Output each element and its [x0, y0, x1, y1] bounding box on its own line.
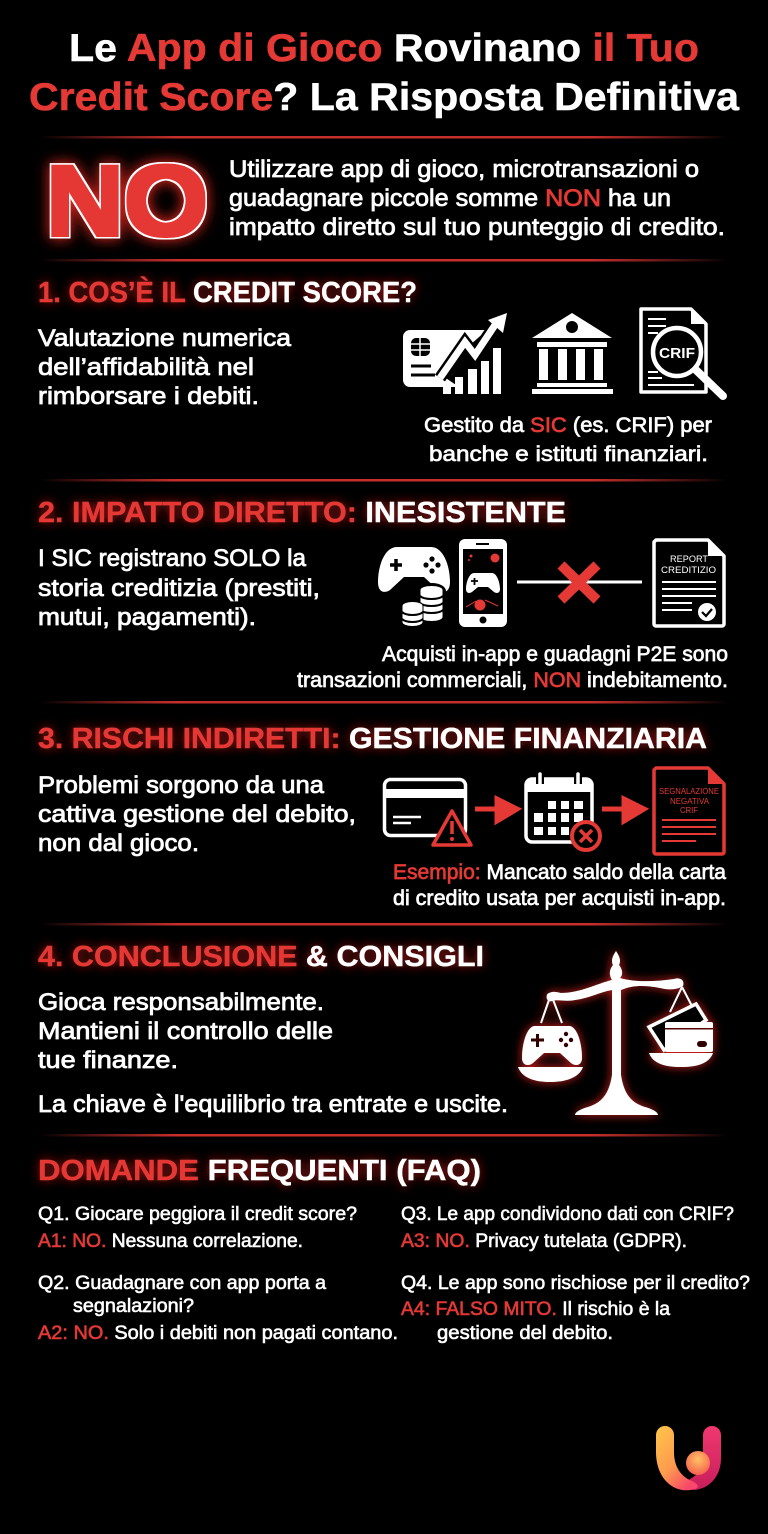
FAQ Q4 [401, 1273, 750, 1344]
icon: gamepad and coins [378, 547, 450, 626]
heading 2: 2. IMPATTO DIRETTO: INESISTENTE [38, 497, 566, 529]
title [29, 27, 740, 119]
text block 2: mutui, pagamenti). [38, 604, 256, 631]
caption 2 [297, 643, 728, 692]
FAQ Q2 [38, 1273, 398, 1344]
FAQ Q3: Q3. Le app condividono dati con CRIF? [401, 1204, 734, 1225]
text block 1: Valutazione numerica [38, 325, 292, 352]
FAQ Q4: gestione del debito. [437, 1323, 613, 1344]
FAQ Q4: A4: FALSO MITO. Il rischio è la [401, 1299, 670, 1320]
icon: CRIF document with magnifier [641, 309, 723, 396]
text block 1: dell’affidabilità nel [38, 354, 254, 381]
icon: brand logo [656, 1426, 721, 1490]
panel: NO verdict [46, 145, 725, 256]
text block 3 [38, 772, 356, 857]
FAQ Q2: A2: NO. Solo i debiti non pagati contano. [38, 1323, 398, 1344]
big NO: NO [46, 145, 208, 256]
verdict text: guadagnare piccole somme NON ha un [229, 185, 671, 212]
panel: section 3 indirect risks [38, 723, 726, 910]
text block 4: Mantieni il controllo delle [38, 1018, 333, 1045]
icon: balance scale with gamepad and card [518, 951, 713, 1115]
caption 3: di credito usata per acquisti in-app. [393, 887, 726, 910]
text block 4: Gioca responsabilmente. [38, 989, 324, 1016]
title: Credit Score ? La Risposta Definitiva [29, 76, 740, 119]
verdict text: impatto diretto sul tuo punteggio di credito. [229, 214, 725, 241]
arrow 2 [602, 799, 644, 821]
icon: card with warning [384, 780, 471, 845]
icon: broken link cross [517, 565, 642, 600]
text block 2: I SIC registrano SOLO la [38, 545, 307, 572]
panel: FAQ [38, 1155, 750, 1344]
text block 1 [38, 325, 292, 410]
caption 2: Acquisti in-app e guadagni P2E sono [382, 643, 728, 666]
icon: credit card with rising chart [403, 313, 507, 394]
text block 1: rimborsare i debiti. [38, 383, 259, 410]
panel: section 2 direct impact [38, 497, 728, 692]
icon: phone with game [459, 539, 507, 627]
text block 2: storia creditizia (prestiti, [38, 575, 320, 602]
panel: section 4 conclusion [38, 941, 713, 1118]
FAQ Q2: Q2. Guadagnare con app porta a [38, 1273, 326, 1294]
FAQ Q4: Q4. Le app sono rischiose per il credito? [401, 1273, 750, 1294]
caption 1: Gestito da SIC (es. CRIF) per [424, 414, 712, 437]
icon: calendar with missed payment [526, 773, 600, 850]
verdict text [229, 156, 725, 241]
text block 3: non dal gioco. [38, 830, 199, 857]
icon: negative report: NEGATIVA [670, 797, 710, 806]
icon: negative report: SEGNALAZIONE [659, 787, 719, 796]
title: Le App di Gioco Rovinano il Tuo [69, 27, 699, 70]
FAQ Q3 [401, 1204, 734, 1252]
text block 4 [38, 989, 508, 1118]
icon: bank [532, 313, 613, 394]
caption 3 [393, 861, 726, 910]
icon: credit report document: CREDITIZIO [661, 565, 716, 576]
FAQ Q2: segnalazioni? [73, 1296, 194, 1317]
icon: credit report document: REPORT [670, 554, 708, 565]
text block 3: Problemi sorgono da una [38, 772, 325, 799]
icon: negative report [654, 768, 724, 854]
text block 2 [38, 545, 320, 631]
caption 1: banche e istituti finanziari. [429, 443, 708, 466]
verdict text: Utilizzare app di gioco, microtransazioni o [229, 156, 699, 183]
caption 2: transazioni commerciali, NON indebitamento. [297, 669, 728, 692]
FAQ Q1 [38, 1204, 357, 1252]
FAQ Q1: A1: NO. Nessuna correlazione. [38, 1231, 303, 1252]
FAQ heading: DOMANDE FREQUENTI (FAQ) [38, 1155, 481, 1187]
text block 3: cattiva gestione del debito, [38, 801, 356, 828]
icon: negative report: CRIF [680, 806, 698, 815]
caption 3: Esempio: Mancato saldo della carta [393, 861, 726, 884]
FAQ Q3: A3: NO. Privacy tutelata (GDPR). [401, 1231, 687, 1252]
FAQ Q1: Q1. Giocare peggiora il credit score? [38, 1204, 357, 1225]
heading 3: 3. RISCHI INDIRETTI: GESTIONE FINANZIARIA [38, 723, 707, 755]
panel: section 1 credit score [38, 275, 723, 466]
heading 4: 4. CONCLUSIONE & CONSIGLI [38, 941, 484, 973]
text block 4: tue finanze. [38, 1047, 178, 1074]
icon: CRIF document with magnifier: CRIF [659, 345, 695, 362]
icon: credit report document [654, 540, 724, 626]
text block 4: La chiave è l'equilibrio tra entrate e uscite. [38, 1091, 508, 1118]
arrow 1 [475, 799, 517, 821]
heading 1: 1. COS’È IL CREDIT SCORE? [38, 275, 417, 309]
caption 1 [424, 414, 712, 466]
